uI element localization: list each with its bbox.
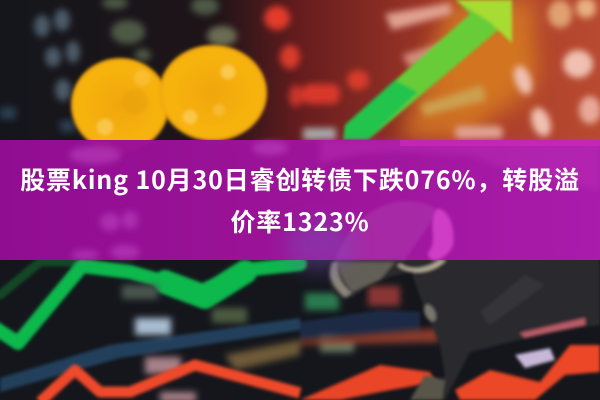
details showing through the band (69, 140, 600, 270)
title: 价率1323% (230, 203, 370, 239)
blurred red ticker numbers (264, 6, 369, 107)
orange glow upper right (400, 0, 540, 140)
blurred chart figures lower left (122, 285, 440, 400)
translucent magenta title band (0, 140, 600, 260)
lower right orange band (300, 345, 600, 400)
blurred ticker numbers upper left (0, 0, 237, 132)
bull (328, 258, 600, 400)
title (20, 161, 580, 239)
coin: left (71, 58, 169, 152)
green line chart (0, 262, 300, 343)
coin: right (159, 45, 267, 141)
title: 股票king 10月30日睿创转债下跌076%，转股溢 (20, 161, 580, 197)
blurred yellow figures (420, 85, 486, 116)
blurred pale ticker numbers upper right (303, 0, 600, 140)
blue trend band (0, 310, 420, 392)
upper background glow (0, 0, 600, 145)
green rising arrow (343, 0, 512, 140)
orange line chart (40, 365, 300, 400)
